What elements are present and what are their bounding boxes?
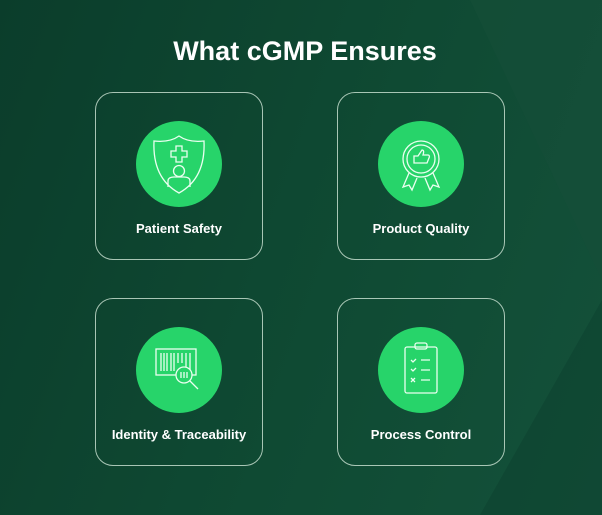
label: Identity & Traceability bbox=[112, 427, 246, 442]
label: Process Control bbox=[371, 427, 471, 442]
panel: product quality bbox=[337, 92, 505, 260]
label: Patient Safety bbox=[136, 221, 222, 236]
panel: identity & traceability bbox=[95, 298, 263, 466]
icon: barcode magnifier bbox=[136, 327, 222, 413]
icon: clipboard checklist bbox=[378, 327, 464, 413]
label: Product Quality bbox=[373, 221, 469, 236]
icon: badge thumbs up bbox=[378, 121, 464, 207]
title: What cGMP Ensures bbox=[173, 36, 437, 66]
panel: patient safety bbox=[95, 92, 263, 260]
panel: process control bbox=[337, 298, 505, 466]
icon: shield with person bbox=[136, 121, 222, 207]
